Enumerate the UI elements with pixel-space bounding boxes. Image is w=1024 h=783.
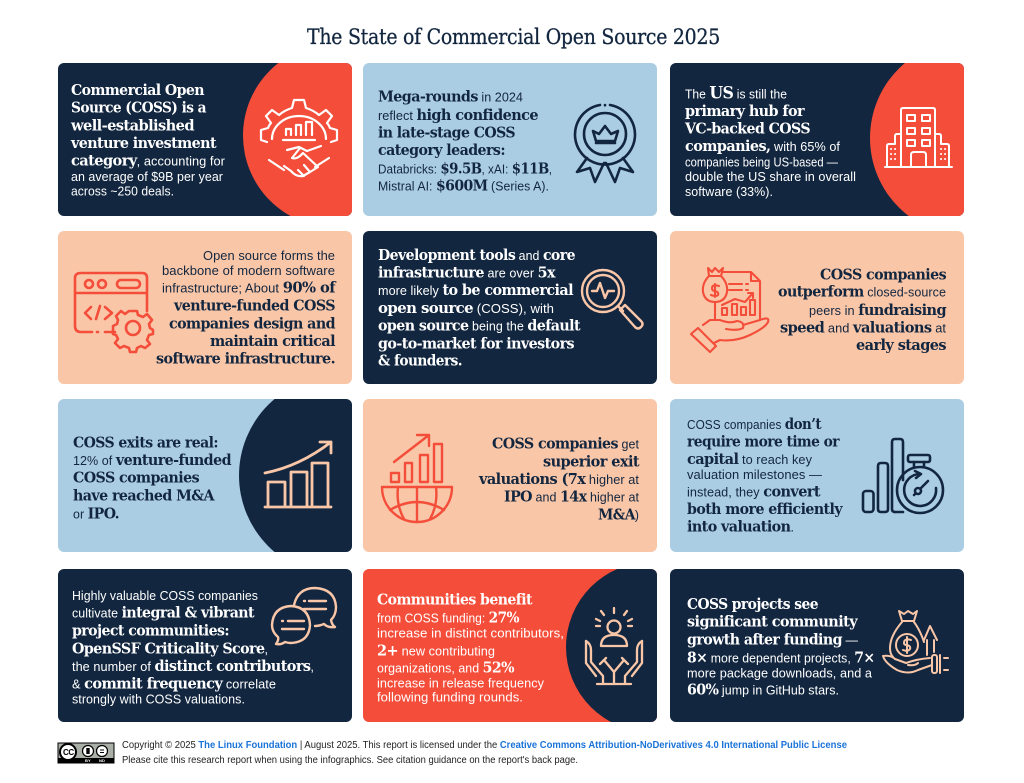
panel: project communities bbox=[58, 569, 352, 722]
panel text: COSS exits: COSS companies bbox=[73, 470, 199, 487]
panel: community growth bbox=[670, 569, 964, 722]
panel text: software infrastructure: infrastructure; About 90% of bbox=[162, 280, 337, 297]
panel text: capital efficiency: instead, they convert bbox=[687, 484, 821, 501]
panel text: capital efficiency: capital to reach key bbox=[687, 451, 812, 468]
panel text: exit valuations: valuations (7x higher at bbox=[478, 471, 639, 488]
icon: Creative Commons BY-ND badge bbox=[58, 743, 114, 763]
panel text: US hub: companies being US-based — bbox=[685, 155, 838, 170]
panel text: mega-rounds: reflect high confidence bbox=[378, 107, 538, 124]
panel text: mega-rounds bbox=[378, 89, 552, 195]
panel text: software infrastructure bbox=[156, 248, 337, 368]
panel text: development tools: & founders. bbox=[378, 353, 462, 370]
panel text: development tools bbox=[378, 247, 581, 370]
panel text: community growth: more package downloads, and a bbox=[687, 665, 873, 680]
panel text: investment category: across ~250 deals. bbox=[71, 184, 174, 199]
panel text: project communities: project communities: bbox=[72, 622, 229, 639]
panel text: communities benefit: increase in distinct contributors, bbox=[377, 625, 564, 640]
panel text: software infrastructure: venture-funded COSS bbox=[173, 297, 335, 314]
panel text: development tools: Development tools and core bbox=[378, 247, 575, 264]
panel text: COSS exits: COSS exits are real: bbox=[73, 434, 218, 451]
panel text: investment category: category, accounting for bbox=[71, 153, 226, 170]
panel text: fundraising speed bbox=[778, 266, 946, 354]
panel text: capital efficiency bbox=[687, 416, 843, 536]
panel: software infrastructure bbox=[58, 231, 352, 384]
panel text: community growth: growth after funding — bbox=[687, 631, 858, 648]
panel text: software infrastructure: software infrastructure. bbox=[156, 351, 335, 368]
panel text: fundraising speed: outperform closed-source bbox=[778, 284, 946, 301]
panel text: capital efficiency: valuation milestones — bbox=[687, 467, 822, 482]
icon: money bag on hand with arrow bbox=[883, 611, 948, 673]
icon: hands lifting a person bbox=[586, 608, 642, 684]
panel text: US hub bbox=[684, 83, 856, 199]
panel text: capital efficiency: into valuation. bbox=[687, 519, 794, 536]
panel text: software infrastructure: backbone of modern software bbox=[162, 263, 335, 278]
panel: communities benefit bbox=[363, 569, 657, 722]
panel: US hub bbox=[670, 63, 964, 216]
icon: award medal bbox=[575, 105, 635, 182]
panel text: communities benefit: following funding rounds. bbox=[377, 690, 523, 705]
panel text: community growth bbox=[687, 596, 874, 698]
footer: copyright and citation: Please cite this research report when using the infographics. See citation guidance on the report's back page. bbox=[122, 755, 578, 766]
icon: Creative Commons BY-ND badge: ND bbox=[99, 758, 105, 763]
panel text: mega-rounds: Databricks: $9.5B, xAI: $11B, bbox=[378, 160, 552, 177]
panel: development tools bbox=[363, 231, 657, 384]
panel text: investment category: well-established bbox=[70, 117, 194, 134]
panel text: COSS exits: 12% of venture-funded bbox=[73, 452, 231, 469]
panel text: US hub: software (33%). bbox=[685, 184, 773, 199]
panel text: communities benefit bbox=[377, 591, 564, 705]
title: The State of Commercial Open Source 2025 bbox=[307, 25, 720, 50]
panel text: COSS exits: or IPO. bbox=[73, 505, 119, 522]
panel text: project communities: strongly with COSS valuations. bbox=[72, 692, 245, 707]
panel text: development tools: more likely to be commercial bbox=[378, 282, 574, 299]
footer: copyright and citation bbox=[122, 740, 847, 766]
panel text: capital efficiency: COSS companies don’t bbox=[687, 416, 822, 433]
icon: office buildings bbox=[885, 108, 952, 167]
icon: gear and handshake bbox=[261, 100, 337, 176]
panel text: software infrastructure: maintain critical bbox=[210, 333, 336, 350]
panel text: communities benefit: organizations, and 52% bbox=[377, 660, 515, 677]
panel text: exit valuations: COSS companies get bbox=[492, 435, 639, 452]
panel text: fundraising speed: early stages bbox=[856, 337, 946, 354]
panel: COSS exits bbox=[58, 399, 352, 552]
icon: globe with growth bars bbox=[382, 435, 452, 522]
panel text: mega-rounds: in late-stage COSS bbox=[378, 125, 515, 142]
panel text: communities benefit: increase in release frequency bbox=[377, 675, 544, 690]
panel text: investment category: venture investment bbox=[70, 135, 217, 152]
panel text: software infrastructure: companies design and bbox=[169, 315, 335, 332]
panel text: COSS exits: have reached M&A bbox=[73, 487, 215, 504]
panel text: communities benefit: from COSS funding: 27% bbox=[377, 609, 519, 626]
panel text: mega-rounds: Mega-rounds in 2024 bbox=[378, 89, 523, 106]
icon: Creative Commons BY-ND badge: CC bbox=[63, 748, 74, 757]
panel text: project communities: & commit frequency correlate bbox=[72, 676, 276, 693]
panel text: investment category: Source (COSS) is a bbox=[71, 100, 207, 117]
panel text: community growth: COSS projects see bbox=[687, 596, 818, 613]
panel text: fundraising speed: peers in fundraising bbox=[809, 302, 946, 319]
panel text: communities benefit: 2+ new contributing bbox=[377, 643, 495, 660]
panel text: development tools: open source (COSS), with bbox=[378, 300, 554, 317]
panel text: fundraising speed: speed and valuations at bbox=[780, 319, 946, 336]
icon: magnifier with pulse bbox=[582, 270, 642, 328]
panel text: development tools: infrastructure are over 5x bbox=[378, 264, 556, 281]
panel text: exit valuations bbox=[478, 435, 640, 523]
panel text: fundraising speed: COSS companies bbox=[820, 266, 946, 283]
panel text: project communities: OpenSSF Criticality Score, bbox=[72, 640, 268, 657]
panel text: US hub: companies, with 65% of bbox=[685, 138, 840, 155]
icon: bars and stopwatch bbox=[863, 439, 943, 513]
icon: money bag, report and hand bbox=[691, 268, 768, 352]
panel text: exit valuations: IPO and 14x higher at bbox=[504, 489, 639, 506]
panel text: US hub: VC-backed COSS bbox=[684, 121, 810, 138]
icon: code window and gear bbox=[75, 273, 153, 352]
panel: mega-rounds bbox=[363, 63, 657, 216]
panel text: US hub: primary hub for bbox=[685, 103, 805, 120]
panel text: investment category: an average of $9B per year bbox=[71, 169, 224, 184]
panel text: development tools: go-to-market for investors bbox=[378, 335, 574, 352]
panel text: exit valuations: M&A) bbox=[598, 506, 639, 523]
panel text: community growth: 8× more dependent projects, 7× bbox=[687, 649, 874, 666]
panel text: software infrastructure: Open source forms the bbox=[203, 248, 335, 263]
panel text: community growth: significant community bbox=[687, 614, 858, 631]
panel text: investment category: Commercial Open bbox=[71, 82, 205, 99]
panel text: US hub: double the US share in overall bbox=[685, 169, 856, 184]
panel text: project communities: cultivate integral & vibrant bbox=[72, 605, 255, 622]
panel text: investment category bbox=[70, 82, 226, 199]
panel text: capital efficiency: require more time or bbox=[687, 433, 840, 450]
panel text: US hub: The US is still the bbox=[685, 83, 787, 103]
panel: capital efficiency bbox=[670, 399, 964, 552]
panel text: project communities: Highly valuable COSS companies bbox=[72, 588, 258, 603]
panel text: project communities bbox=[72, 588, 314, 707]
panel text: mega-rounds: category leaders: bbox=[378, 142, 505, 159]
panel text: development tools: open source being the default bbox=[378, 318, 581, 335]
panel text: communities benefit: Communities benefit bbox=[377, 591, 533, 608]
panel text: exit valuations: superior exit bbox=[543, 453, 640, 470]
icon: rising bar chart bbox=[265, 442, 331, 507]
panel text: project communities: the number of distinct contributors, bbox=[72, 658, 314, 675]
panel: fundraising speed bbox=[670, 231, 964, 384]
icon: speech bubbles bbox=[272, 588, 336, 644]
panel text: COSS exits bbox=[73, 434, 231, 522]
panel: exit valuations bbox=[363, 399, 657, 552]
icon: Creative Commons BY-ND badge: BY bbox=[85, 758, 91, 763]
panel text: capital efficiency: both more efficiently bbox=[687, 501, 843, 518]
panel text: mega-rounds: Mistral AI: $600M (Series A). bbox=[378, 178, 549, 195]
panel: COSS investment category bbox=[58, 63, 352, 216]
panel text: community growth: 60% jump in GitHub stars. bbox=[687, 681, 839, 698]
footer: copyright and citation: Copyright © 2025 The Linux Foundation | August 2025. This report is licensed under the Creative Commons Attribution-NoDerivatives 4.0 International Public License bbox=[122, 740, 847, 751]
